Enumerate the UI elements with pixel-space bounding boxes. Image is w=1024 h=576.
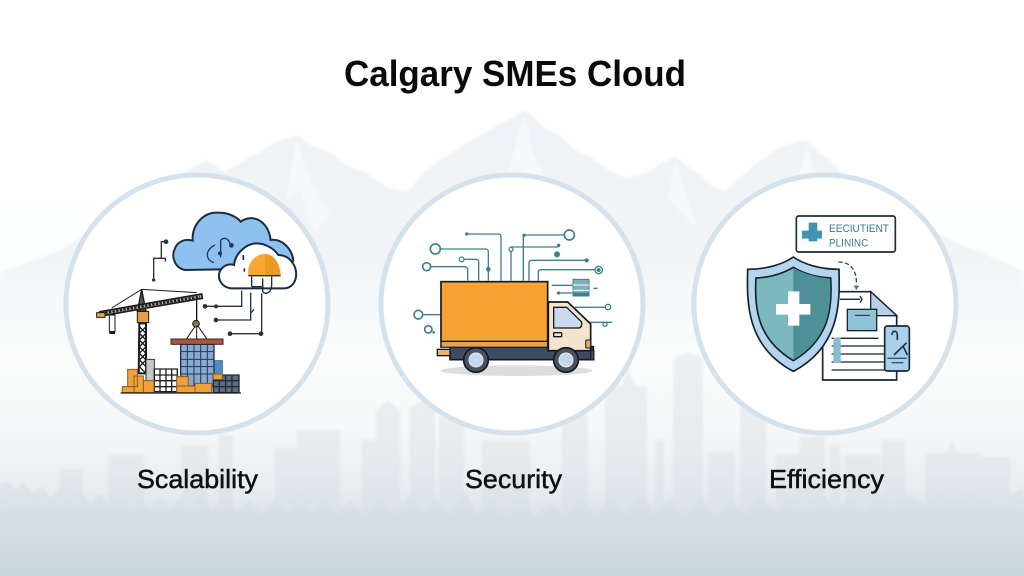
- background: mountain range: [0, 110, 1024, 370]
- icon: truck chassis: [437, 347, 593, 360]
- label: Security: Security: [465, 464, 562, 494]
- icon: truck cab: [548, 302, 594, 360]
- panel: efficiency: [694, 175, 956, 494]
- title: Calgary SMEs Cloud: [344, 53, 686, 94]
- circle: scalability: [66, 175, 328, 433]
- icon: sign box: EECIUTIENT: [829, 223, 889, 235]
- icon: server block: [573, 279, 589, 296]
- circle: efficiency: [694, 175, 956, 433]
- icon: wheels: [464, 348, 578, 372]
- background: city skyline: [60, 352, 1010, 520]
- icon: crane, building and clouds: [97, 213, 296, 393]
- panel: scalability: [66, 175, 328, 494]
- arrow: dashed curve: [838, 262, 859, 290]
- icon: blue cloud: [173, 213, 293, 270]
- icon: white cloud: [219, 243, 296, 288]
- icon: sign box: [796, 216, 895, 252]
- background: tree line: [0, 480, 1024, 576]
- icon: office tower under construction: [171, 339, 223, 386]
- icon: document: [823, 292, 897, 380]
- circle: security: [381, 175, 643, 433]
- icon: delivery truck with circuits: [414, 230, 612, 376]
- icon: tower crane: [97, 289, 207, 373]
- icon: truck shadow: [440, 365, 592, 376]
- icon: shield: [747, 257, 839, 371]
- icon: circuit nodes: [432, 232, 589, 334]
- label: Efficiency: Efficiency: [769, 464, 884, 494]
- icon: cloud connector wires: [153, 240, 263, 335]
- icon: clipboard: [885, 326, 909, 371]
- icon: cargo box: [441, 282, 548, 347]
- icon: blue cloud symbol: [207, 238, 233, 263]
- icon: building materials and scaffolds: [121, 359, 241, 393]
- label: Scalability: Scalability: [137, 464, 258, 494]
- panel: security: [381, 175, 643, 494]
- icon: sign box: PLININC: [829, 237, 869, 249]
- icon: circuit lines: [414, 230, 612, 333]
- icon: helmet: [243, 254, 281, 293]
- icon: document, shield and sign: [747, 216, 909, 380]
